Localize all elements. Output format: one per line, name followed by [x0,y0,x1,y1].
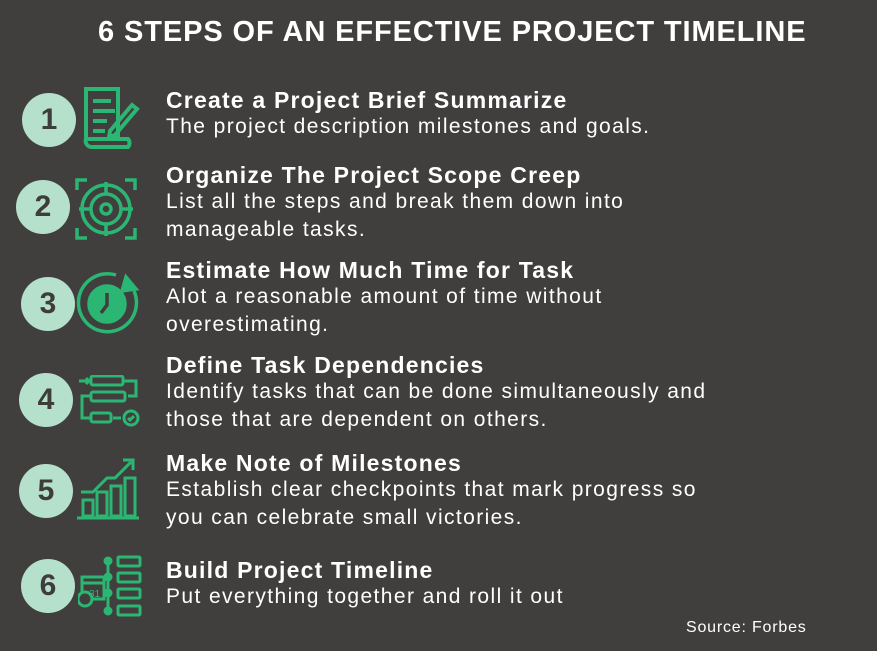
source: Source: Forbes [686,619,807,636]
step title 5: Make Note of Milestones [166,450,462,476]
step title 3: Estimate How Much Time for Task [166,257,574,283]
step text 3: overestimating. [166,313,329,336]
number circle 4: 4 [38,383,54,416]
step 5 [19,450,697,529]
step text 5 [166,478,697,529]
step title 1: Create a Project Brief Summarize [166,87,567,113]
step 4 [19,352,706,431]
step text 3: Alot a reasonable amount of time without [166,285,603,308]
step text 4: those that are dependent on others. [166,408,548,431]
step text 3 [166,285,603,336]
step text 5: you can celebrate small victories. [166,506,523,529]
step text 2: List all the steps and break them down into [166,190,624,213]
icon: growth chart [77,458,139,520]
number circle 2: 2 [35,190,51,223]
step 3 [21,257,603,336]
step 1 [22,87,650,149]
number circle 6 [21,559,75,613]
number circle 4 [19,373,73,427]
icon: timeline calendar [78,556,142,616]
step text 1: The project description milestones and goals. [166,115,650,138]
icon: document with pen [84,87,140,149]
number circle 3: 3 [40,287,56,320]
step title 4: Define Task Dependencies [166,352,485,378]
step 6 [21,556,564,616]
number circle 1: 1 [41,103,57,136]
step text 4 [166,380,706,431]
number circle 2 [16,180,70,234]
step text 2: manageable tasks. [166,218,366,241]
number circle 1 [22,93,76,147]
step text 2 [166,190,624,241]
number circle 3 [21,277,75,331]
title: 6 STEPS OF AN EFFECTIVE PROJECT TIMELINE [98,16,806,48]
step text 4: Identify tasks that can be done simultaneously and [166,380,706,403]
number circle 6: 6 [40,569,56,602]
number circle 5: 5 [38,474,54,507]
step text 5: Establish clear checkpoints that mark progress so [166,478,697,501]
icon: target [75,178,137,240]
step text 6: Put everything together and roll it out [166,585,564,608]
icon: clock refresh [76,272,140,334]
step 2 [16,162,624,241]
number circle 5 [19,464,73,518]
step title 2: Organize The Project Scope Creep [166,162,581,188]
step title 6: Build Project Timeline [166,557,434,583]
icon: flow dependencies [79,375,140,426]
icon: timeline calendar: 31 [89,589,101,600]
